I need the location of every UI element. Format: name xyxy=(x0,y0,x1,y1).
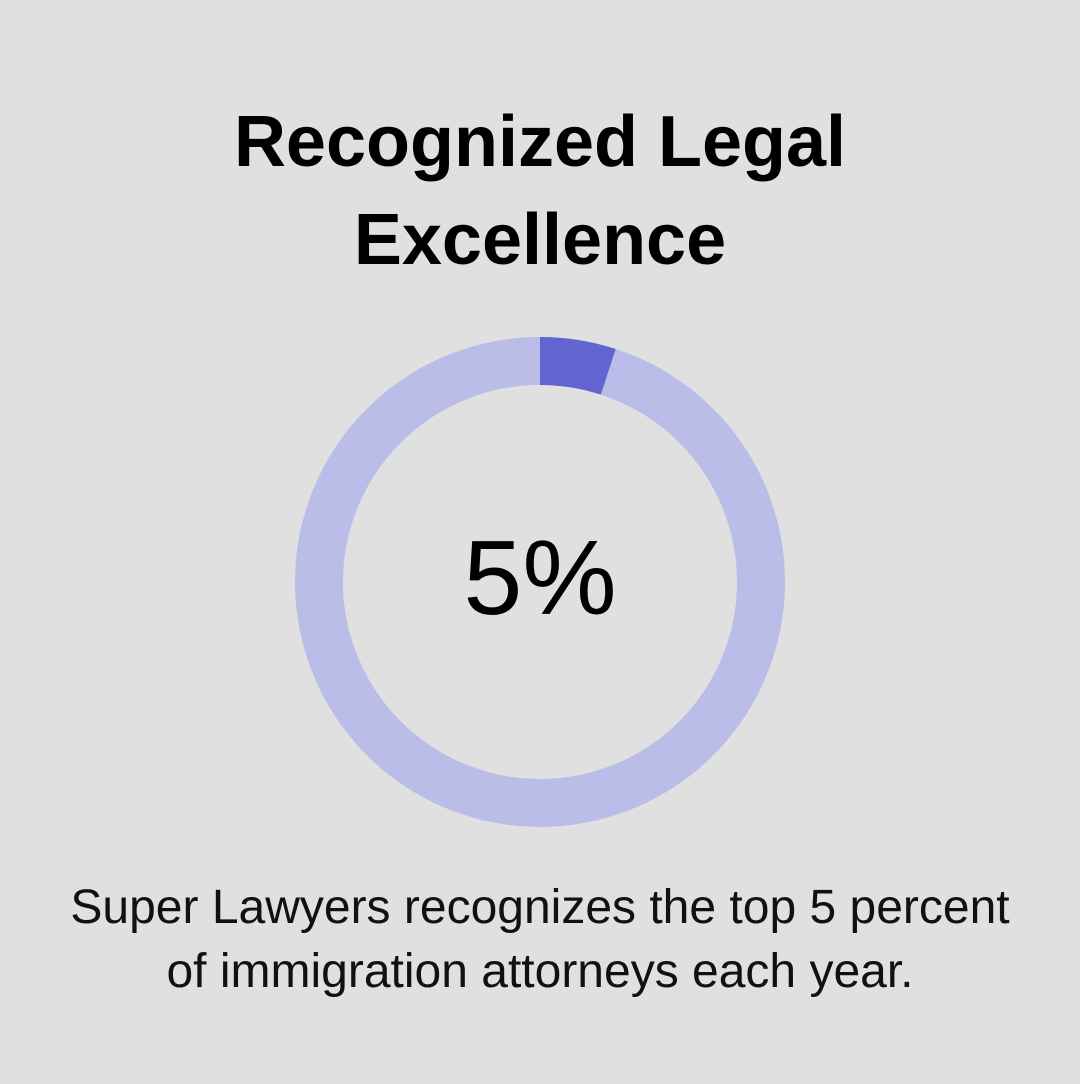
title: Recognized Legal xyxy=(234,102,846,182)
center value: 5% xyxy=(463,519,617,637)
caption text: of immigration attorneys each year. xyxy=(166,945,914,998)
caption text: Super Lawyers recognizes the top 5 percent xyxy=(70,881,1010,934)
ring: remaining share xyxy=(319,361,761,803)
title: Excellence xyxy=(354,200,726,280)
ring segment: 5 percent xyxy=(319,361,761,803)
title xyxy=(234,102,846,280)
caption text xyxy=(70,881,1010,998)
